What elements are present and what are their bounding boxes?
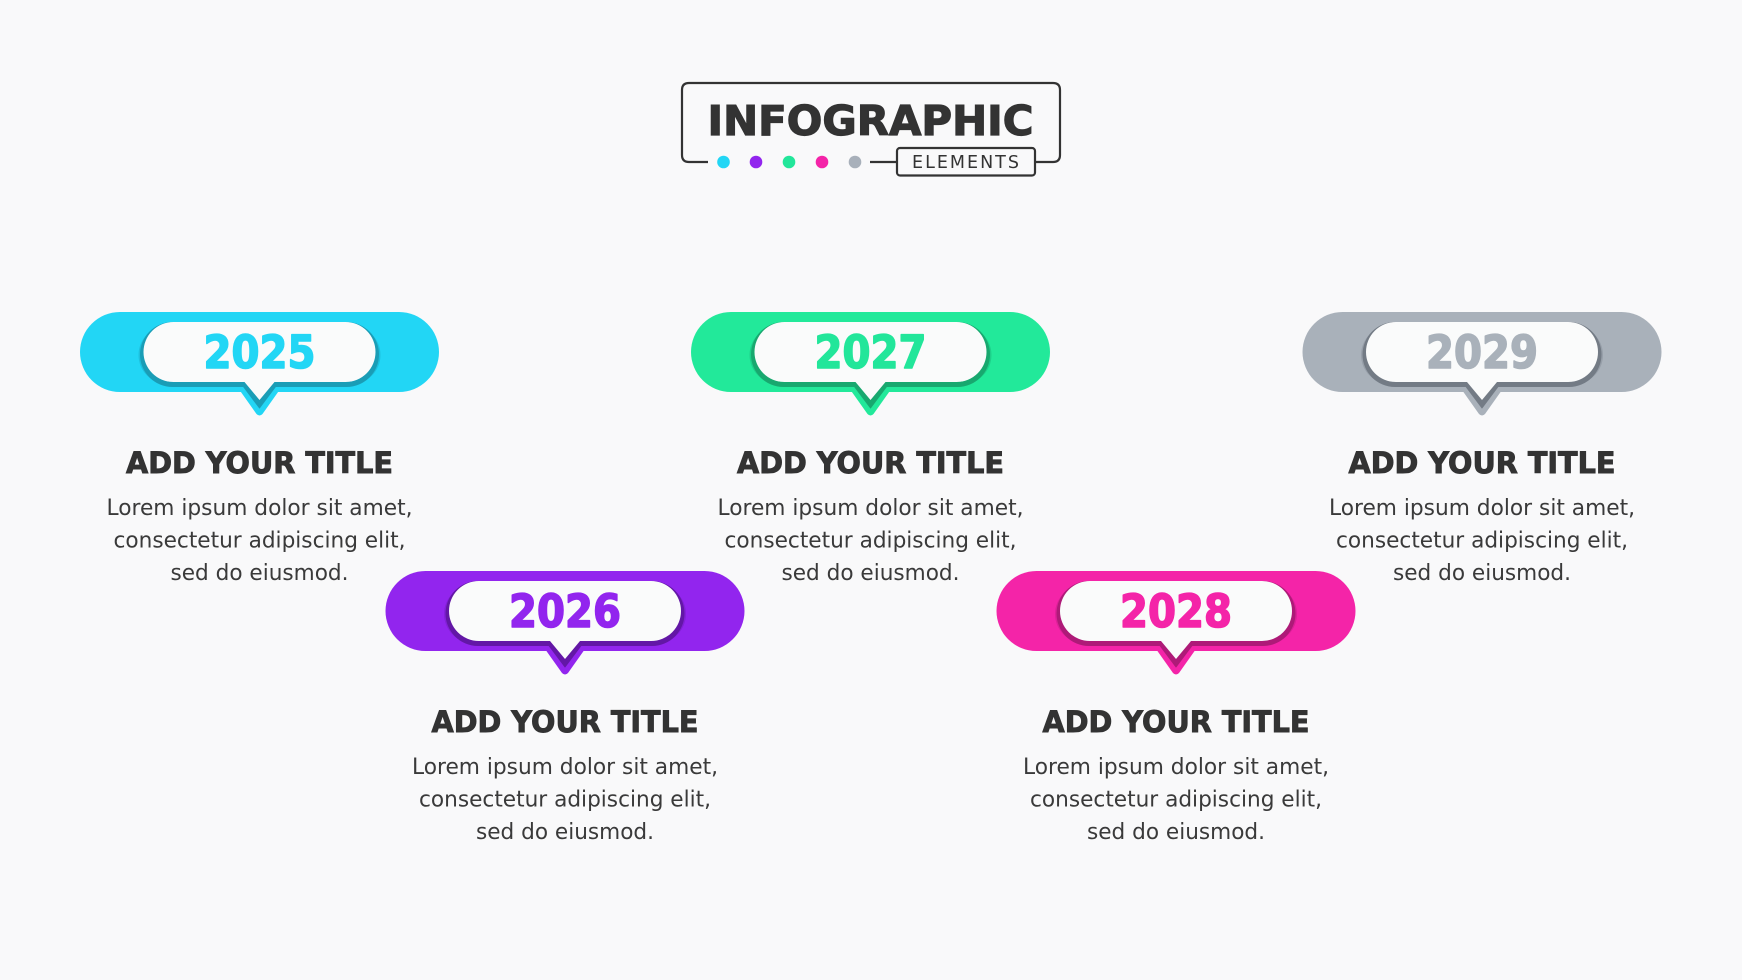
heading: ADD YOUR TITLE <box>737 446 1004 480</box>
body text: Lorem ipsum dolor sit amet, <box>1023 755 1329 780</box>
body text: sed do eiusmod. <box>170 561 348 586</box>
body text: consectetur adipiscing elit, <box>1030 788 1322 812</box>
body text <box>718 496 1024 586</box>
badge 2025: 2025 <box>204 326 316 379</box>
header frame <box>682 83 1060 162</box>
badge 2027 <box>691 312 1050 416</box>
milestone 2028 <box>996 571 1356 845</box>
body text: Lorem ipsum dolor sit amet, <box>718 496 1024 521</box>
badge 2027: 2027 <box>814 326 926 379</box>
heading: ADD YOUR TITLE <box>1042 705 1310 739</box>
heading: ADD YOUR TITLE <box>126 446 393 480</box>
title: INFOGRAPHIC: INFOGRAPHIC <box>708 97 1034 145</box>
header logo <box>682 83 1060 176</box>
badge 2026: 2026 <box>509 585 621 638</box>
milestone 2025 <box>80 312 439 586</box>
body text: consectetur adipiscing elit, <box>114 528 406 554</box>
subtitle box: ELEMENTS <box>897 148 1035 176</box>
body text <box>1023 755 1329 845</box>
body text: sed do eiusmod. <box>1087 820 1265 845</box>
body text: consectetur adipiscing elit, <box>419 788 711 812</box>
badge 2025 <box>80 312 439 416</box>
milestone 2027 <box>691 312 1050 586</box>
milestone 2026 <box>386 571 744 845</box>
subtitle box: ELEMENTS: ELEMENTS <box>912 153 1019 173</box>
body text <box>106 496 412 586</box>
body text: consectetur adipiscing elit, <box>724 528 1016 554</box>
heading: ADD YOUR TITLE <box>432 705 698 739</box>
badge 2029 <box>1302 312 1662 416</box>
body text <box>412 755 718 845</box>
badge 2028: 2028 <box>1120 585 1232 638</box>
body text: sed do eiusmod. <box>1393 561 1571 586</box>
badge 2028 <box>996 571 1356 674</box>
badge 2029: 2029 <box>1426 326 1538 379</box>
body text: sed do eiusmod. <box>476 820 654 845</box>
milestone 2029 <box>1302 312 1662 586</box>
colour dots <box>717 156 861 168</box>
badge 2026 <box>386 571 744 674</box>
body text: Lorem ipsum dolor sit amet, <box>1329 496 1635 521</box>
heading: ADD YOUR TITLE <box>1348 446 1616 480</box>
body text: Lorem ipsum dolor sit amet, <box>106 496 412 521</box>
body text: Lorem ipsum dolor sit amet, <box>412 755 718 780</box>
body text: sed do eiusmod. <box>782 561 960 586</box>
body text <box>1329 496 1635 586</box>
body text: consectetur adipiscing elit, <box>1336 528 1628 554</box>
